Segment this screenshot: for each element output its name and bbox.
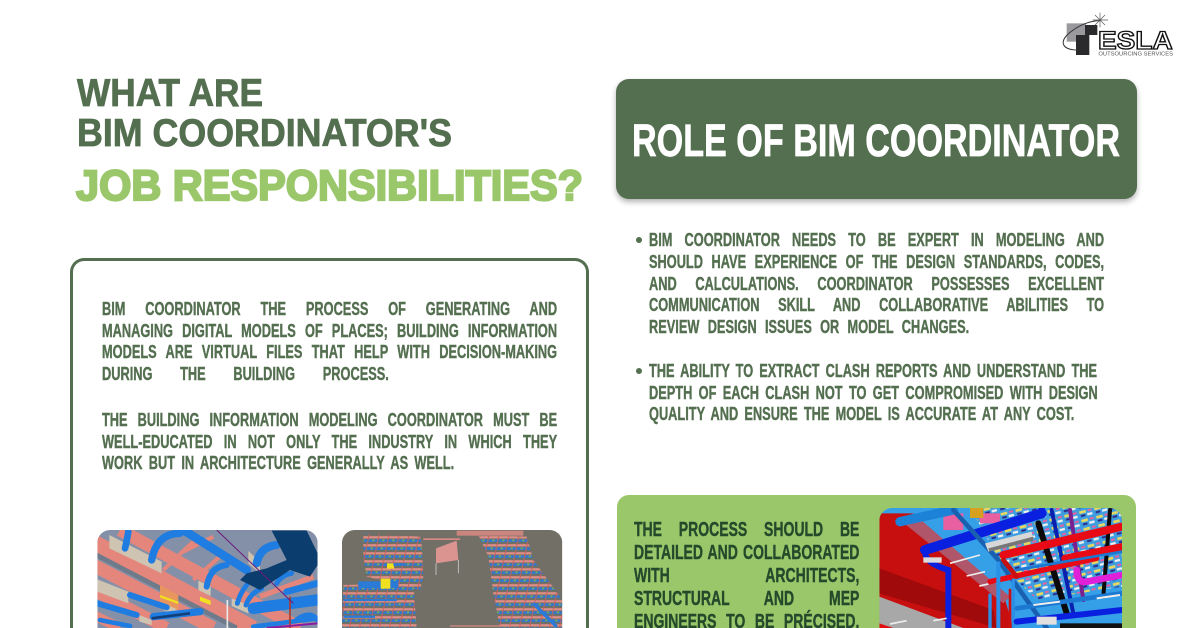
logo: Tesla Outsourcing Services bbox=[1062, 12, 1174, 58]
title: What are BIM Coordinator's Job Responsibilities?: JOB RESPONSIBILITIES? bbox=[76, 162, 583, 210]
image: colourful MEP pipe model bbox=[879, 508, 1122, 628]
text block: process collaboration: WITH ARCHITECTS, bbox=[634, 565, 859, 587]
text block: what a BIM coordinator does: MODELS ARE VIRTUAL FILES THAT HELP WITH DECISION-MAKING bbox=[102, 342, 557, 362]
logo: Tesla Outsourcing Services: OUTSOURCING SERVICES bbox=[1098, 52, 1174, 58]
heading panel: Role of BIM Coordinator bbox=[616, 79, 1137, 199]
bullet marker bbox=[636, 237, 642, 243]
bullet marker bbox=[636, 368, 642, 374]
title: What are BIM Coordinator's Job Responsibilities?: WHAT ARE bbox=[77, 72, 263, 115]
bullet list: coordinator skills: SHOULD HAVE EXPERIENCE OF THE DESIGN STANDARDS, CODES, bbox=[649, 252, 1104, 272]
bullet list: coordinator skills: AND CALCULATIONS. COORDINATOR POSSESSES EXCELLENT bbox=[649, 274, 1104, 294]
text block: process collaboration: STRUCTURAL AND MEP bbox=[634, 588, 859, 610]
text block: process collaboration bbox=[634, 519, 859, 628]
panel: left description bbox=[70, 258, 589, 628]
text block: what a BIM coordinator does: WORK BUT IN ARCHITECTURE GENERALLY AS WELL. bbox=[102, 453, 454, 473]
text block: what a BIM coordinator does: THE BUILDING INFORMATION MODELING COORDINATOR MUST BE bbox=[102, 410, 557, 430]
text block: process collaboration: THE PROCESS SHOULD BE bbox=[634, 519, 859, 541]
text block: what a BIM coordinator does: DURING THE BUILDING PROCESS. bbox=[102, 364, 389, 384]
panel: process collaboration card bbox=[617, 495, 1136, 628]
text block: what a BIM coordinator does bbox=[102, 299, 558, 473]
title: What are BIM Coordinator's Job Responsibilities? bbox=[75, 72, 583, 210]
bullet list: coordinator skills: COMMUNICATION SKILL AND COLLABORATIVE ABILITIES TO bbox=[649, 295, 1104, 315]
bullet list: coordinator skills: QUALITY AND ENSURE THE MODEL IS ACCURATE AT ANY COST. bbox=[649, 404, 1074, 424]
image: ductwork BIM model and building plan model bbox=[97, 530, 562, 628]
text block: what a BIM coordinator does: WELL-EDUCATED IN NOT ONLY THE INDUSTRY IN WHICH THEY bbox=[102, 432, 557, 452]
bullet list: coordinator skills: BIM COORDINATOR NEEDS TO BE EXPERT IN MODELING AND bbox=[649, 230, 1104, 250]
bullet list: coordinator skills: THE ABILITY TO EXTRACT CLASH REPORTS AND UNDERSTAND THE bbox=[649, 361, 1097, 381]
text block: what a BIM coordinator does: MANAGING DIGITAL MODELS OF PLACES; BUILDING INFORMATION bbox=[102, 321, 557, 341]
text block: process collaboration: DETAILED AND COLLABORATED bbox=[634, 542, 859, 564]
bullet list: coordinator skills: DEPTH OF EACH CLASH NOT TO GET COMPROMISED WITH DESIGN bbox=[649, 383, 1098, 403]
text block: what a BIM coordinator does: BIM COORDINATOR THE PROCESS OF GENERATING AND bbox=[102, 299, 557, 319]
bullet list: coordinator skills: REVIEW DESIGN ISSUES OR MODEL CHANGES. bbox=[649, 317, 969, 337]
title: What are BIM Coordinator's Job Responsibilities?: BIM COORDINATOR'S bbox=[77, 112, 452, 155]
bullet list: coordinator skills bbox=[636, 230, 1104, 424]
logo: Tesla Outsourcing Services: ESLA bbox=[1098, 27, 1173, 55]
